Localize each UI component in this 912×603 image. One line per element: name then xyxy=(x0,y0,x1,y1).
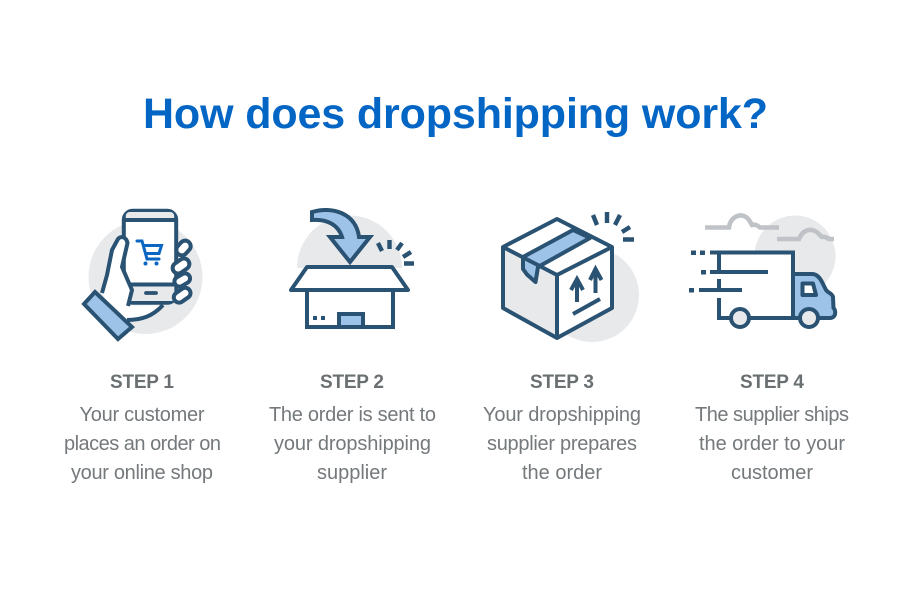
fingers xyxy=(170,238,193,305)
step 2 description: supplier xyxy=(317,462,387,484)
step 1 description xyxy=(64,404,221,484)
cab xyxy=(793,274,835,318)
icon: shopping cart xyxy=(137,241,162,266)
clouds xyxy=(705,215,779,228)
step 2 label: STEP 2 xyxy=(320,372,384,393)
up arrows xyxy=(571,269,602,314)
icon: hand holding phone xyxy=(84,211,202,339)
panel: step 3 xyxy=(483,212,641,484)
step 2 description: The order is sent to xyxy=(269,404,436,426)
step 3 label: STEP 3 xyxy=(530,372,594,393)
sparkle rays xyxy=(593,212,634,240)
arrow xyxy=(312,210,370,262)
step 3 description: Your dropshipping xyxy=(483,404,641,426)
packing tape xyxy=(523,230,590,282)
wheels xyxy=(731,309,749,327)
step 1 label: STEP 1 xyxy=(110,372,174,393)
step 1 description: places an order on xyxy=(64,433,221,455)
step 4 description xyxy=(695,404,849,484)
panel: step 1 xyxy=(64,211,221,484)
panel: step 2 xyxy=(269,210,436,484)
step 2 description xyxy=(269,404,436,484)
title: How does dropshipping work? xyxy=(143,90,768,138)
shirt cuff xyxy=(84,292,132,339)
step 4 description: customer xyxy=(731,462,813,484)
step 3 description xyxy=(483,404,641,484)
step 2 description: your dropshipping xyxy=(274,433,431,455)
icon: delivery truck xyxy=(689,215,836,327)
step 4 description: the order to your xyxy=(699,433,845,455)
step 4 label: STEP 4 xyxy=(740,372,804,393)
step 4 description: The supplier ships xyxy=(695,404,849,426)
step 3 description: supplier prepares xyxy=(487,433,637,455)
sparkle rays xyxy=(378,240,414,264)
icon: box receiving arrow xyxy=(291,210,414,327)
truck body xyxy=(710,252,793,318)
step 3 description: the order xyxy=(522,462,602,484)
panel: step 4 xyxy=(689,215,849,484)
step 1 description: your online shop xyxy=(71,462,213,484)
hand palm and thumb xyxy=(102,237,165,328)
step 1 description: Your customer xyxy=(80,404,205,426)
icon: parcel xyxy=(503,212,639,342)
